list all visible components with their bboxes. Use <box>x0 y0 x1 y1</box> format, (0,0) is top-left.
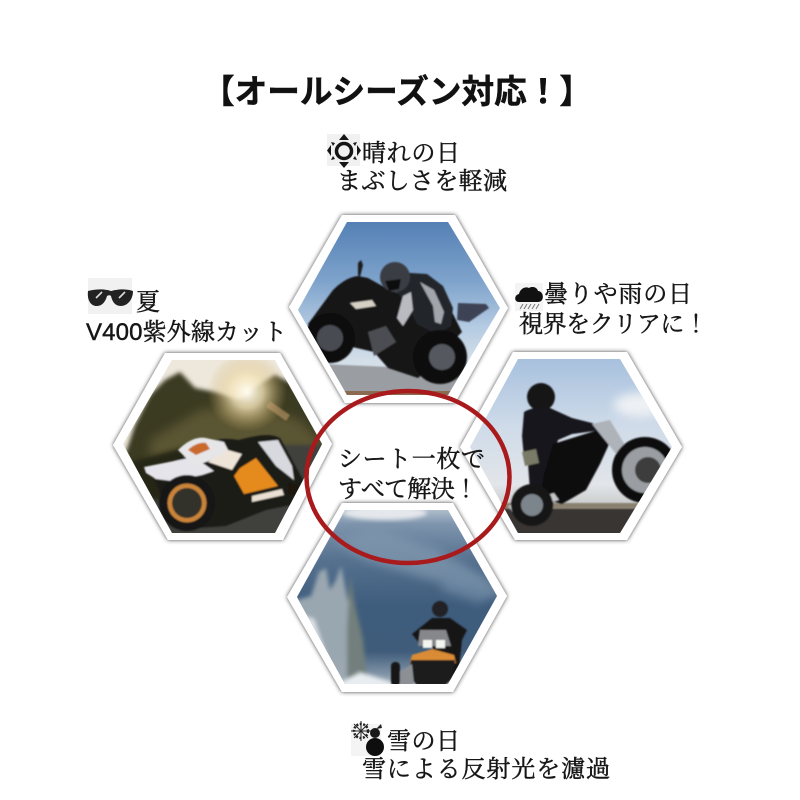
hexagon photo: snowmobile <box>287 503 507 692</box>
hexagon photo: summer sport bike <box>113 352 332 540</box>
icon: snowflake and snowman <box>351 721 384 756</box>
callout text <box>338 446 485 503</box>
callout text: シート一枚で <box>338 446 485 473</box>
label: cloudy or rainy day <box>515 281 708 338</box>
hexagon photo: cloudy cruiser <box>460 352 682 540</box>
label: summer: 夏 <box>136 289 160 316</box>
motorcycle <box>150 435 314 528</box>
label: cloudy or rainy day: 視界をクリアに！ <box>519 311 708 338</box>
callout text: すべて解決！ <box>338 476 478 503</box>
icon: sun <box>327 134 361 168</box>
icon: sunglasses <box>88 278 133 314</box>
label: sunny day: 晴れの日 <box>362 140 460 167</box>
label: summer: V400紫外線カット <box>86 319 287 346</box>
red ellipse callout <box>306 391 510 563</box>
rider on snowmobile <box>432 601 448 617</box>
label: sunny day <box>327 134 507 195</box>
title: 【オールシーズン対応！】 <box>202 73 592 110</box>
label: cloudy or rainy day: 曇りや雨の日 <box>544 281 692 308</box>
rider and motorcycle <box>527 383 555 411</box>
rider and motorcycle <box>308 276 462 378</box>
icon: rain cloud <box>515 283 543 311</box>
label: snowy day: 雪による反射光を濾過 <box>362 756 610 783</box>
label: summer <box>86 278 287 346</box>
snowy trees <box>298 566 368 684</box>
label: sunny day: まぶしさを軽減 <box>337 168 507 195</box>
label: snowy day <box>351 721 610 783</box>
label: snowy day: 雪の日 <box>387 728 460 755</box>
hexagon photo: sunny sport bike <box>289 215 510 403</box>
